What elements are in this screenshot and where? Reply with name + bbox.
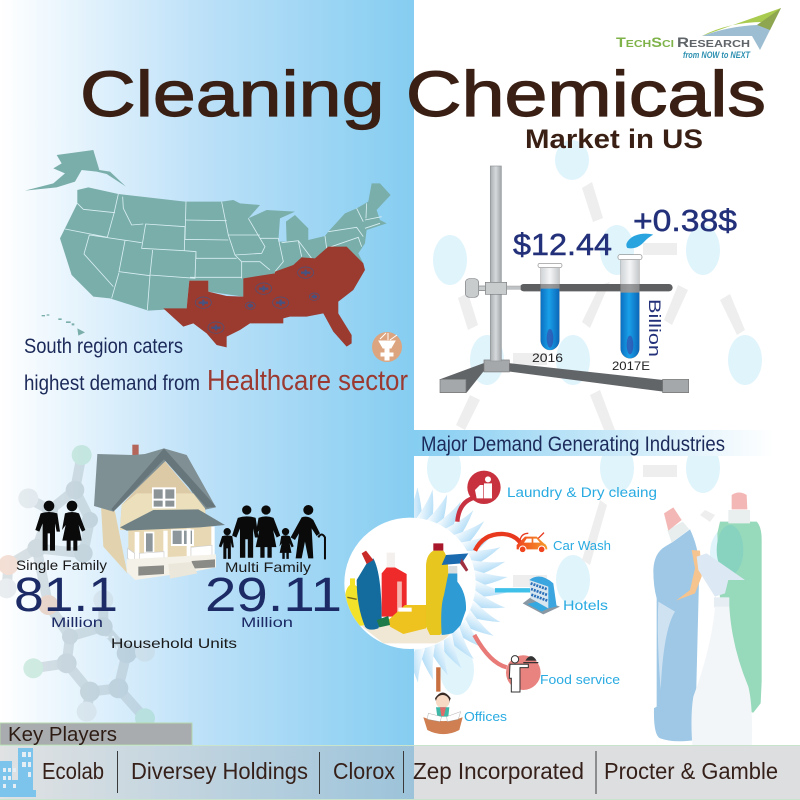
label: 2016: 2016 xyxy=(532,351,563,365)
background: right molecule pattern xyxy=(427,140,762,695)
connector: food service xyxy=(474,635,507,667)
company: Ecolab: Ecolab xyxy=(42,758,104,784)
connector: car wash xyxy=(475,534,522,551)
connector: offices xyxy=(432,667,445,692)
background: left blue panel xyxy=(0,0,414,800)
label: single family: Single Family xyxy=(16,557,107,573)
connector: laundry xyxy=(457,497,480,522)
panel: US map xyxy=(25,150,391,347)
heading: key players xyxy=(0,723,192,746)
icon: offices xyxy=(423,692,463,734)
illustration: large faint bottles xyxy=(653,492,762,750)
map: Alaska xyxy=(25,150,126,191)
label: hotels: Hotels xyxy=(563,597,608,613)
icon: single family xyxy=(35,501,85,551)
value: multi family: 29.11 xyxy=(205,569,342,622)
decorative molecule: left xyxy=(0,445,155,728)
icon: house xyxy=(94,445,225,580)
label: car wash: Car Wash xyxy=(553,538,611,553)
icon: building xyxy=(0,748,36,797)
map: Hawaii xyxy=(42,314,85,336)
subtitle: Market in US xyxy=(525,124,703,154)
value: increase: +0.38$ xyxy=(633,203,737,238)
company: Zep Incorporated: Zep Incorporated xyxy=(413,758,584,784)
panel: households xyxy=(35,501,325,559)
connector: hotels xyxy=(495,584,532,597)
logo: TechSci Research: RESEARCH xyxy=(677,34,750,50)
label: multi family: Multi Family xyxy=(225,559,311,575)
icon: multi family xyxy=(219,505,325,559)
company: Procter and Gamble: Procter & Gamble xyxy=(604,758,778,784)
icon: car wash xyxy=(517,533,547,553)
map: state borders xyxy=(65,194,382,310)
label: Billion: Billion xyxy=(645,299,664,357)
map: hospital markers xyxy=(195,267,319,333)
label: food service: Food service xyxy=(540,672,620,687)
illustration: petal ring xyxy=(414,488,508,682)
logo: TechSci Research xyxy=(616,8,781,60)
text: south region: highest demand from xyxy=(24,372,200,395)
test tube: 2016 xyxy=(538,263,562,350)
icon: healthcare xyxy=(372,332,402,362)
heading: key players: Key Players xyxy=(8,724,117,746)
icon: food service xyxy=(506,655,541,692)
unit: multi family million: Million xyxy=(241,614,293,630)
panel: industries heading band: Major Demand Generating Industries xyxy=(421,433,725,456)
value: single family: 81.1 xyxy=(14,569,118,622)
icon: droplet xyxy=(626,234,653,248)
text: south region: South region caters xyxy=(24,335,183,358)
unit: single family million: Million xyxy=(51,614,103,630)
chart: market size test tubes xyxy=(440,166,689,393)
stand: pole xyxy=(490,166,501,361)
map: continental states xyxy=(60,183,391,311)
panel: key players bar xyxy=(0,746,800,800)
text: south region: Healthcare sector xyxy=(207,365,408,397)
logo: TechSci Research: TECHSCI xyxy=(616,34,674,50)
icon: hotels xyxy=(523,577,560,614)
title: Cleaning Chemicals xyxy=(80,58,766,130)
value: 2016: $12.44 xyxy=(513,227,612,262)
panel: industries xyxy=(414,470,560,734)
label: offices: Offices xyxy=(464,709,508,724)
logo: TechSci Research: from NOW to NEXT xyxy=(683,50,751,60)
map: south region xyxy=(163,247,365,347)
text: south region xyxy=(24,335,408,397)
caption: household units: Household Units xyxy=(111,635,237,651)
test tube: 2017E xyxy=(618,255,642,358)
illustration: central cleaning bottles xyxy=(344,518,476,649)
stand: clamp arm xyxy=(465,279,673,297)
stand: base xyxy=(440,363,663,393)
label: laundry: Laundry & Dry cleaing xyxy=(507,485,657,500)
label: 2017E: 2017E xyxy=(612,359,650,373)
company: Diversey Holdings: Diversey Holdings xyxy=(131,758,308,784)
icon: laundry xyxy=(467,471,501,504)
company: Clorox: Clorox xyxy=(333,758,395,784)
